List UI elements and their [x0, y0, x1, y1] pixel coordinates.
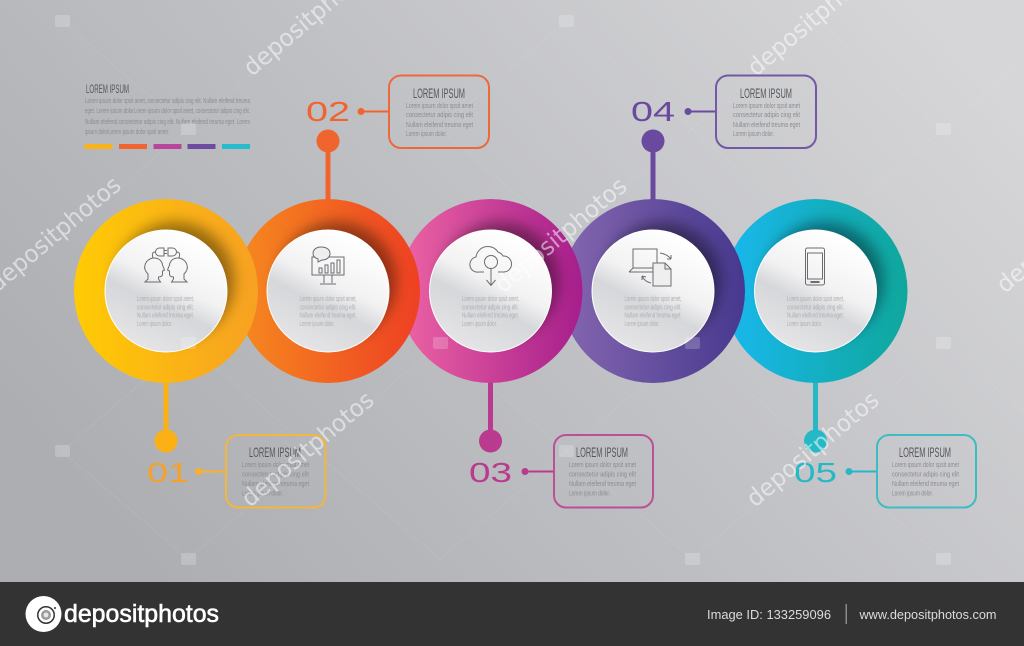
disc text 01: consectetur adipis cing elit. [137, 302, 194, 312]
number 04: 04 [631, 96, 675, 127]
disc text 01: Nullam eleifend treuma eget. [137, 310, 194, 320]
leader 04 [684, 108, 716, 115]
watermark camera marks [55, 15, 951, 565]
stock watermark text: depositphotos [489, 172, 632, 299]
leader 03 [522, 468, 554, 475]
leader 02 [358, 108, 389, 115]
disc text 02: consectetur adipis cing elit. [300, 302, 356, 312]
callout box 04: Nullam eleifend treuma eget [733, 120, 801, 129]
callout box 02: Lorem ipsum dolor. [406, 129, 447, 138]
disc text 05: consectetur adipis cing elit. [787, 302, 844, 312]
disc text 02: Nullam eleifend treuma eget. [300, 310, 356, 320]
stock watermark text [0, 0, 1024, 513]
website url: www.depositphotos.com [859, 607, 996, 622]
footer divider [846, 604, 847, 624]
icon: laptop and file transfer [629, 249, 671, 286]
disc 01 [105, 230, 227, 352]
callout box 04: LOREM IPSUM [740, 85, 792, 101]
footer logo icon [26, 596, 62, 632]
disc text 05 [787, 294, 844, 328]
disc text 02 [300, 294, 356, 328]
callout box 04: Lorem ipsum dolor. [733, 129, 774, 138]
disc 05 [754, 230, 876, 352]
step 05 connector and callout [794, 375, 976, 508]
callout box 03: Lorem ipsum dolor spsit amet [569, 460, 637, 469]
callout box 02 [389, 76, 489, 148]
callout box 03: consectetur adipis cing elit [569, 470, 637, 478]
disc text 03: consectetur adipis cing elit. [462, 302, 519, 312]
disc text 03 [462, 294, 519, 328]
stock watermark text: depositphotos [236, 386, 379, 513]
icon: cloud download [470, 246, 512, 286]
callout box 02: consectetur adipis cing elit [406, 110, 474, 119]
disc text 04: Nullam eleifend treuma eget. [624, 310, 682, 320]
callout box 01: Lorem ipsum dolor spsit amet [242, 460, 310, 469]
callout box 04 [716, 76, 816, 148]
intro heading: LOREM IPSUM [86, 82, 129, 96]
footer bar [0, 582, 1024, 646]
callout box 02: LOREM IPSUM [413, 85, 465, 101]
colour key bars [84, 144, 250, 149]
callout box 05: Lorem ipsum dolor. [892, 488, 933, 498]
icon: monitor with chart and speech bubble [312, 247, 344, 284]
disc text 02: Lorem ipsum dolor. [300, 319, 334, 328]
step 04 connector and callout [631, 76, 816, 206]
disc 03 [430, 230, 552, 352]
disc text 03: Lorem ipsum dolor. [462, 319, 497, 328]
callout box 01 [226, 435, 326, 508]
stem and node 04 [642, 130, 664, 206]
leader 05 [846, 468, 877, 475]
intro text block [84, 82, 250, 149]
stem and node 05 [804, 375, 827, 452]
stem and node 01 [154, 375, 178, 452]
callout box 05: LOREM IPSUM [899, 444, 951, 460]
icon: two heads with plug [145, 248, 187, 282]
callout box 01: LOREM IPSUM [249, 444, 301, 460]
number 01: 01 [147, 457, 189, 488]
callout box 03 [554, 435, 653, 508]
disc text 03: Nullam eleifend treuma eget. [462, 310, 519, 320]
disc text 01: Lorem ipsum dolor spsit amet, [137, 294, 194, 303]
intro paragraph: ipsum dolorLorem ipsum dolor spsit amet. [85, 127, 169, 136]
intro paragraph [85, 96, 250, 136]
callout box 01: consectetur adipis cing elit [242, 470, 310, 478]
intro paragraph: eget. Lorem ipsum dolorLorem ipsum dolor spsit amet, consectetur adipis cing elit. [85, 106, 250, 115]
callout box 05: Lorem ipsum dolor spsit amet [892, 460, 960, 469]
step 01 connector and callout [147, 375, 326, 508]
ring 02 [236, 199, 420, 383]
number 05: 05 [794, 457, 837, 488]
disc text 04: consectetur adipis cing elit. [624, 302, 682, 312]
callout box 03: Nullam eleifend treuma eget [569, 479, 637, 488]
stem and node 02 [316, 130, 340, 206]
callout box 01: Nullam eleifend treuma eget [242, 479, 310, 488]
leader 01 [195, 468, 226, 475]
step 02 connector and callout [306, 76, 489, 206]
number 03: 03 [469, 457, 512, 488]
stem and node 03 [479, 375, 502, 452]
disc text 03: Lorem ipsum dolor spsit amet, [462, 294, 519, 303]
number 02: 02 [306, 96, 350, 127]
disc text 04 [624, 294, 682, 328]
disc text 05: Nullam eleifend treuma eget. [787, 310, 844, 320]
callout box 05 [877, 435, 976, 508]
disc text 01: Lorem ipsum dolor. [137, 319, 172, 328]
ring 04 [561, 199, 745, 383]
callout box 05: Nullam eleifend treuma eget [892, 479, 960, 488]
callout box 04: consectetur adipis cing elit [733, 110, 801, 119]
image id: Image ID: 133259096 [707, 607, 831, 622]
ring 05 [724, 199, 908, 383]
disc text 05: Lorem ipsum dolor. [787, 319, 822, 328]
disc text 05: Lorem ipsum dolor spsit amet, [787, 294, 844, 303]
callout box 05: consectetur adipis cing elit [892, 470, 960, 478]
footer logo wordmark: depositphotos [64, 600, 219, 628]
disc text 02: Lorem ipsum dolor spsit amet, [300, 294, 356, 303]
disc text 04: Lorem ipsum dolor. [624, 319, 660, 328]
callout box 02: Nullam eleifend treuma eget [406, 120, 474, 129]
intro paragraph: Lorem ipsum dolor spsit amet, consectetur adipis cing elit. Nullam eleifend treuma [85, 96, 250, 105]
ring 03 [398, 199, 582, 383]
disc text 01 [137, 294, 194, 328]
callout box 02: Lorem ipsum dolor spsit amet [406, 101, 474, 110]
callout box 03: LOREM IPSUM [576, 444, 628, 460]
disc 04 [592, 230, 714, 352]
disc text 04: Lorem ipsum dolor spsit amet, [624, 294, 682, 303]
callout box 04: Lorem ipsum dolor spsit amet [733, 101, 801, 110]
intro paragraph: Nullam eleifend consectetur adipis cing elit. Nullam eleifend treuma eget. Lorem [85, 117, 250, 126]
callout box 01: Lorem ipsum dolor. [242, 488, 283, 498]
stock watermark text: depositphotos [741, 386, 884, 513]
step 03 connector and callout [469, 375, 653, 508]
callout box 03: Lorem ipsum dolor. [569, 488, 610, 498]
icon: smartphone [806, 248, 824, 285]
ring 01 [74, 199, 258, 383]
disc 02 [267, 230, 389, 352]
